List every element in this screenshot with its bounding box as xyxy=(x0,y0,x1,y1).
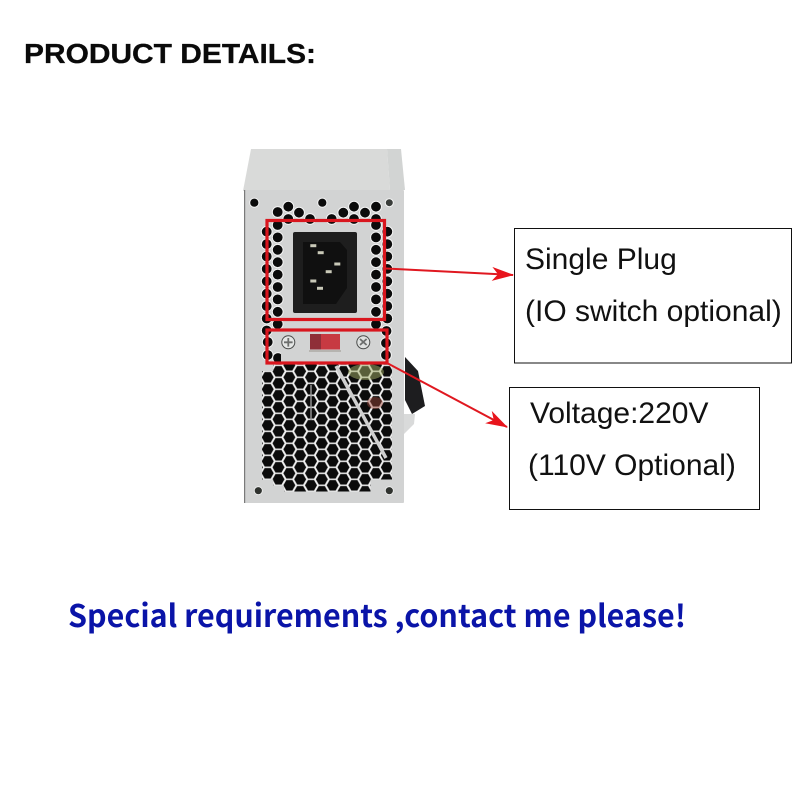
switch plate with screws xyxy=(281,329,371,362)
callout: single plug xyxy=(514,228,792,363)
arrow to Single Plug xyxy=(386,268,513,275)
unit top face xyxy=(243,149,405,191)
cable behind the unit xyxy=(404,357,425,434)
unit back panel xyxy=(244,190,404,503)
callout: voltage: (110V Optional) xyxy=(528,449,736,482)
callout: single plug: Single Plug xyxy=(525,243,677,276)
highlight: voltage switch xyxy=(267,330,387,363)
title: PRODUCT DETAILS: xyxy=(24,38,316,69)
power socket xyxy=(293,232,357,313)
upper ventilation holes xyxy=(250,198,393,363)
highlight: socket xyxy=(267,220,384,320)
lower corner screws xyxy=(254,487,393,495)
lower ventilation honeycomb xyxy=(262,364,392,492)
callout: voltage: Voltage:220V xyxy=(530,397,708,430)
power supply unit illustration xyxy=(243,149,425,503)
arrow to Voltage xyxy=(387,363,507,427)
contact note: Special requirements ,contact me please! xyxy=(68,591,686,636)
callout: single plug: (IO switch optional) xyxy=(525,295,782,328)
callout: voltage xyxy=(510,388,760,510)
